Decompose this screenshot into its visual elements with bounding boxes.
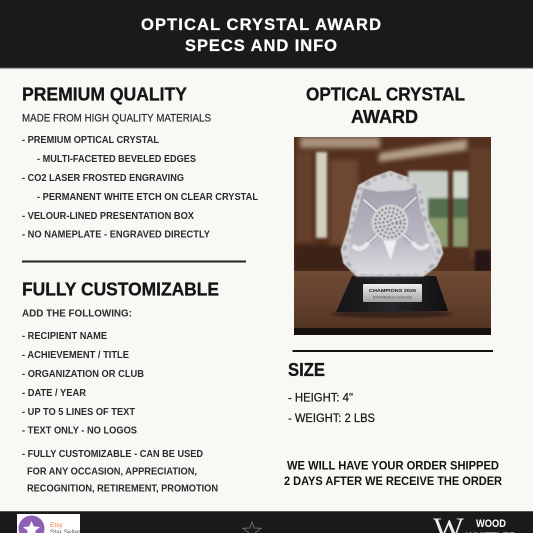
logo: wood whittler: [433, 512, 516, 533]
customization list: - DATE / YEAR: [22, 388, 87, 399]
subheading: materials: MADE FROM HIGH QUALITY MATERIALS: [22, 112, 211, 124]
customization list: [22, 331, 144, 436]
size specs: - WEIGHT: 2 LBS: [288, 413, 375, 425]
logo: wood whittler: WOOD: [476, 518, 506, 530]
icon: star outline: [243, 522, 261, 533]
size specs: - HEIGHT: 4": [288, 392, 353, 404]
materials list: [22, 135, 258, 240]
nameplate: [363, 284, 422, 302]
panel: premium quality: [22, 84, 258, 240]
customization note: [22, 449, 218, 494]
badge: etsy star seller: Etsy: [50, 522, 63, 529]
panel: size: [288, 360, 375, 425]
heading: product name: [306, 84, 465, 127]
badge: etsy star seller: [17, 514, 81, 533]
shipping note: [284, 460, 503, 488]
subheading: add the following: ADD THE FOLLOWING:: [22, 308, 132, 320]
header title: [141, 16, 381, 55]
table top: [294, 271, 491, 322]
materials list: - MULTI-FACETED BEVELED EDGES: [37, 154, 196, 165]
materials list: - CO2 LASER FROSTED ENGRAVING: [22, 173, 184, 184]
customization list: - TEXT ONLY - NO LOGOS: [22, 426, 137, 436]
customization note: FOR ANY OCCASION, APPRECIATION,: [27, 466, 197, 478]
customization list: - RECIPIENT NAME: [22, 331, 107, 342]
nameplate: CHAMPIONS 2026: [369, 288, 417, 293]
customization note: RECOGNITION, RETIREMENT, PROMOTION: [27, 484, 218, 494]
materials list: - NO NAMEPLATE - ENGRAVED DIRECTLY: [22, 230, 210, 240]
customization note: - FULLY CUSTOMIZABLE - CAN BE USED: [22, 449, 203, 460]
heading: product name: AWARD: [351, 107, 418, 127]
footer bar: [0, 511, 533, 533]
materials list: - PREMIUM OPTICAL CRYSTAL: [22, 135, 159, 146]
heading: premium quality: PREMIUM QUALITY: [22, 84, 187, 104]
heading: size: SIZE: [288, 360, 325, 380]
nameplate: RIVERDALE LEAGUE: [373, 296, 413, 300]
crystal body: [341, 171, 443, 277]
size specs: [288, 392, 375, 425]
heading: fully customizable: FULLY CUSTOMIZABLE: [22, 280, 219, 300]
golf clubs: [354, 197, 427, 249]
materials list: - VELOUR-LINED PRESENTATION BOX: [22, 211, 194, 222]
materials list: - PERMANENT WHITE ETCH ON CLEAR CRYSTAL: [37, 192, 258, 203]
customization list: - ORGANIZATION OR CLUB: [22, 369, 144, 380]
customization list: - ACHIEVEMENT / TITLE: [22, 350, 129, 361]
product photo: crystal golf award: [294, 137, 491, 335]
header title: SPECS AND INFO: [185, 37, 337, 55]
panel: fully customizable: [22, 280, 219, 494]
golf ball: [372, 204, 408, 241]
header title: OPTICAL CRYSTAL AWARD: [141, 16, 381, 34]
black base: [336, 276, 448, 312]
shipping note: 2 DAYS AFTER WE RECEIVE THE ORDER: [284, 476, 503, 488]
heading: product name: OPTICAL CRYSTAL: [306, 84, 465, 104]
header banner: [0, 0, 533, 68]
golf tee: [383, 240, 397, 261]
customization list: - UP TO 5 LINES OF TEXT: [22, 407, 135, 418]
shipping note: WE WILL HAVE YOUR ORDER SHIPPED: [287, 460, 499, 472]
